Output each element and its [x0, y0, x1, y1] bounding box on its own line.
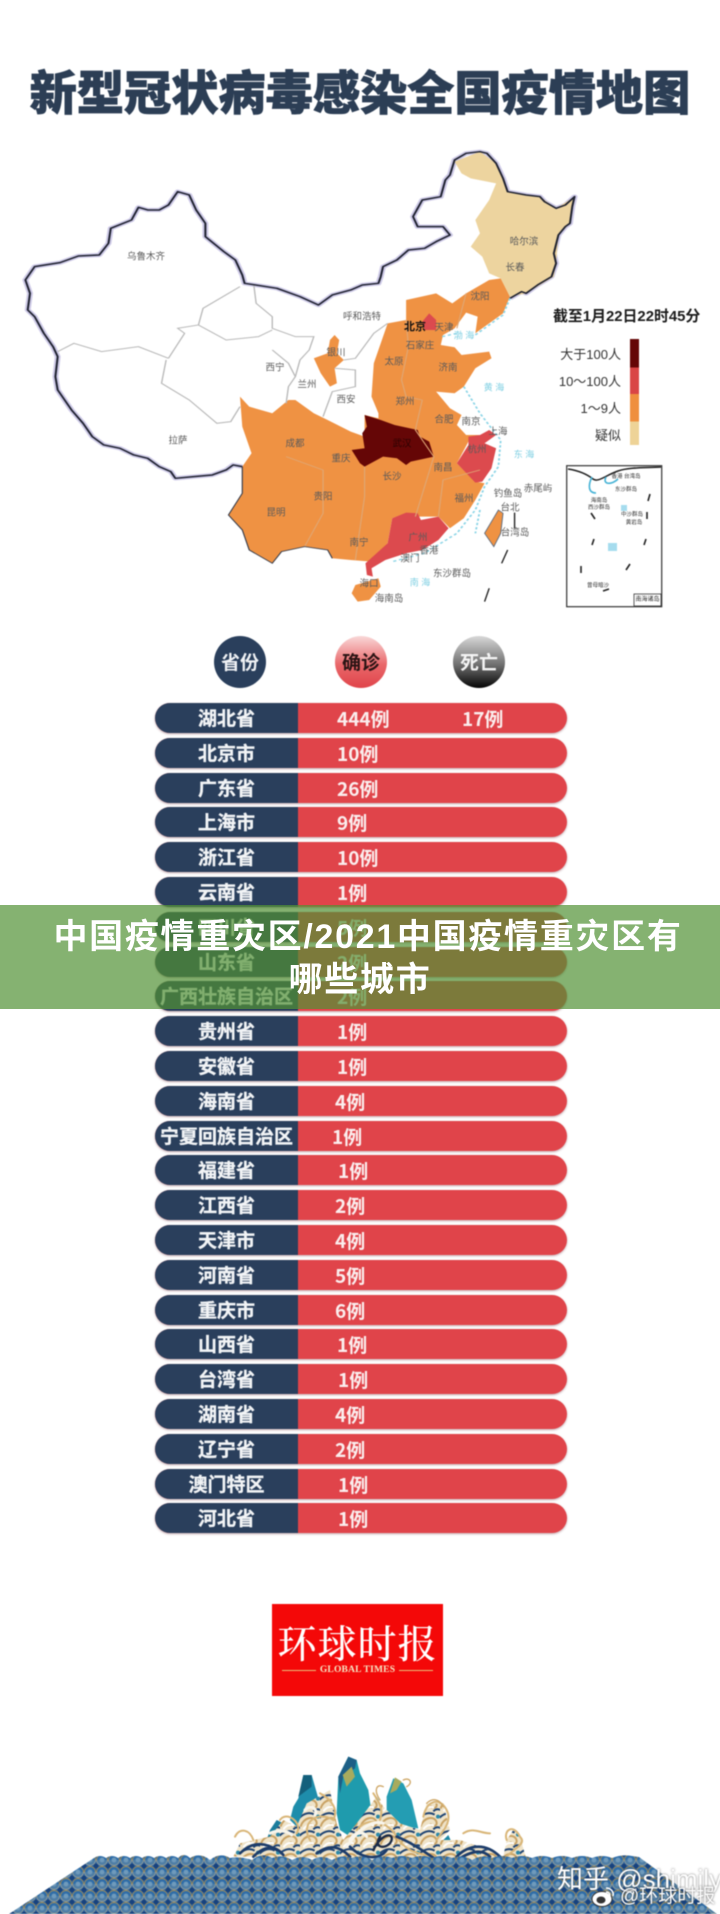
row: 湖北省: 444例	[337, 705, 390, 732]
waves	[233, 1779, 527, 1860]
row: 贵州省	[155, 1016, 567, 1046]
row: 海南省: 4例	[335, 1088, 365, 1115]
inset map: South China Sea: 海南岛	[591, 496, 608, 504]
red provinces	[366, 513, 449, 577]
row: 河南省: 5例	[335, 1262, 365, 1289]
row: 浙江省: 10例	[337, 844, 378, 871]
row: 福建省: 福建省	[198, 1156, 255, 1183]
row: 重庆市	[155, 1295, 567, 1325]
column header: confirmed	[335, 636, 387, 688]
city labels: 杭州	[467, 444, 487, 456]
city labels: 长春	[505, 262, 525, 274]
city labels: 钓鱼岛	[494, 488, 522, 500]
city labels: 长沙	[382, 471, 402, 483]
city labels: 南京	[461, 416, 481, 428]
city labels: 北京	[404, 319, 426, 333]
city labels: 广州	[408, 532, 428, 544]
row: 山东省: 山东省	[198, 948, 255, 975]
inset map: South China Sea	[565, 464, 664, 608]
data table	[154, 702, 568, 1536]
city labels: 哈尔滨	[510, 236, 539, 248]
row: 湖北省: 湖北省	[198, 704, 255, 731]
row: 广东省	[155, 773, 567, 803]
row: 云南省: 1例	[337, 879, 367, 906]
city labels: 郑州	[395, 396, 415, 408]
row: 四川省: 5例	[337, 914, 367, 941]
row: 湖北省: 17例	[462, 705, 503, 732]
row: 宁夏回族自治区: 宁夏回族自治区	[160, 1122, 293, 1149]
mountains	[267, 1757, 457, 1860]
row: 江西省: 2例	[335, 1192, 365, 1219]
watermark: weibo	[590, 1884, 716, 1908]
legend title: 截至1月22日22时45分	[553, 309, 700, 325]
Hubei dark region	[352, 415, 434, 467]
row: 澳门特区: 1例	[338, 1471, 368, 1498]
city labels: 重庆	[331, 453, 351, 465]
city labels: 合肥	[434, 414, 454, 426]
logo: Global Times	[272, 1604, 443, 1696]
city labels: 乌鲁木齐	[127, 251, 165, 263]
legend labels: 大于100人	[560, 347, 621, 362]
row: 安徽省: 安徽省	[198, 1052, 255, 1079]
inset map: South China Sea: 中沙群岛	[621, 510, 643, 518]
legend	[552, 308, 700, 446]
row: 辽宁省: 2例	[335, 1436, 365, 1463]
row: 辽宁省	[155, 1434, 567, 1464]
city labels: 银川	[326, 347, 346, 359]
overlay banner with headline: 中国疫情重灾区/2021中国疫情重灾区有	[53, 918, 683, 956]
row: 北京市: 10例	[337, 740, 378, 767]
row: 上海市	[155, 807, 567, 837]
city labels: 福州	[454, 493, 474, 505]
row: 福建省: 1例	[338, 1157, 368, 1184]
row: 江西省	[155, 1190, 567, 1220]
row: 湖南省: 湖南省	[198, 1400, 255, 1427]
national border and provinces	[25, 152, 575, 602]
row: 河北省: 河北省	[198, 1504, 255, 1531]
row: 天津市	[155, 1225, 567, 1255]
city labels: 澳门	[400, 553, 420, 565]
column header: province: 省份	[221, 648, 259, 675]
city labels: 成都	[285, 438, 305, 450]
inset map: South China Sea: 东沙群岛	[615, 485, 637, 493]
city labels: 台湾岛	[501, 527, 529, 539]
beige northeast provinces	[455, 152, 575, 297]
city labels: 东 海	[514, 448, 534, 459]
row: 河南省: 河南省	[198, 1261, 255, 1288]
city labels: 台北	[500, 502, 520, 514]
row: 海南省: 海南省	[198, 1087, 255, 1114]
row: 广东省: 广东省	[198, 774, 255, 801]
city labels: 太原	[384, 356, 404, 368]
legend colour bar	[630, 339, 639, 445]
city labels: 西安	[336, 394, 356, 406]
row: 广西壮族自治区: 2例	[337, 983, 367, 1010]
row: 山西省: 1例	[337, 1331, 367, 1358]
nine dash segments	[485, 513, 515, 602]
row: 天津市: 天津市	[198, 1226, 255, 1253]
row: 台湾省: 台湾省	[198, 1365, 255, 1392]
city labels: 赤尾屿	[524, 483, 552, 495]
row: 湖北省	[155, 703, 567, 733]
overlay banner with headline: 哪些城市	[289, 961, 431, 999]
watermark: weibo: @环球时报	[620, 1886, 715, 1907]
row: 四川省	[155, 912, 567, 942]
row: 北京市	[155, 738, 567, 768]
row: 广西壮族自治区: 广西壮族自治区	[160, 982, 293, 1009]
inset map: South China Sea: 黄岩岛	[626, 518, 643, 526]
watermark: zhihu: 知乎 @shimily	[557, 1864, 720, 1894]
city labels: 香港	[419, 545, 439, 557]
fish-scale sea mound	[9, 1855, 717, 1914]
legend labels: 10～100人	[559, 374, 621, 389]
logo calligraphy: 环球时报	[277, 1614, 438, 1670]
border line	[25, 152, 575, 478]
inset map: South China Sea: 香港 台湾岛	[611, 472, 641, 480]
row: 重庆市: 重庆市	[198, 1296, 255, 1323]
column header: deaths: 死亡	[460, 648, 498, 675]
wave mass	[233, 1790, 527, 1860]
row: 贵州省: 贵州省	[198, 1017, 255, 1044]
row: 浙江省	[155, 842, 567, 872]
city labels: 东沙群岛	[433, 568, 471, 580]
logo English name: GLOBAL TIMES	[320, 1665, 395, 1675]
column header: deaths	[453, 636, 505, 688]
row: 澳门特区	[155, 1469, 567, 1499]
row: 宁夏回族自治区	[155, 1121, 567, 1151]
column header: confirmed: 确诊	[342, 648, 380, 675]
row: 海南省	[155, 1086, 567, 1116]
row: 四川省: 四川省	[198, 913, 255, 940]
row: 辽宁省: 辽宁省	[198, 1435, 255, 1462]
legend labels: 疑似	[595, 428, 621, 443]
row: 湖南省	[155, 1399, 567, 1429]
city labels: 兰州	[297, 379, 317, 391]
city labels: 沈阳	[470, 291, 490, 303]
row: 台湾省	[155, 1364, 567, 1394]
city labels: 天津	[434, 323, 454, 334]
row: 山东省: 2例	[337, 949, 367, 976]
city labels: 西宁	[265, 362, 285, 374]
row: 北京市: 北京市	[198, 739, 255, 766]
row: 台湾省: 1例	[338, 1366, 368, 1393]
map of China	[22, 149, 578, 605]
row: 上海市: 9例	[337, 809, 367, 836]
orange provinces	[228, 278, 510, 563]
row: 江西省: 江西省	[198, 1191, 255, 1218]
row: 天津市: 4例	[335, 1227, 365, 1254]
overlay banner with headline	[0, 905, 720, 1009]
city labels: 海南岛	[375, 593, 403, 605]
city labels: 石家庄	[406, 340, 435, 352]
row: 广东省: 26例	[337, 775, 378, 802]
city labels: 南昌	[433, 462, 453, 474]
legend labels: 1～9人	[581, 401, 621, 416]
icon: weibo	[590, 1886, 615, 1908]
row: 云南省	[155, 877, 567, 907]
city labels	[127, 236, 552, 605]
column header: province	[214, 636, 266, 688]
city labels: 武汉	[392, 438, 412, 450]
row: 山西省: 山西省	[198, 1330, 255, 1357]
row: 河北省	[155, 1503, 567, 1533]
decorative mountains and waves	[8, 1756, 718, 1914]
row: 河南省	[155, 1260, 567, 1290]
row: 湖南省: 4例	[335, 1401, 365, 1428]
row: 重庆市: 6例	[335, 1297, 365, 1324]
row: 云南省: 云南省	[198, 878, 255, 905]
city labels: 上海	[488, 426, 508, 438]
row: 浙江省: 浙江省	[198, 843, 255, 870]
row: 广西壮族自治区	[155, 981, 567, 1011]
city labels: 呼和浩特	[343, 311, 381, 323]
row: 山西省	[155, 1329, 567, 1359]
city labels: 昆明	[266, 508, 286, 519]
city labels: 渤 海	[454, 329, 474, 340]
province lines	[58, 285, 388, 423]
coastline	[392, 298, 510, 562]
row: 澳门特区: 澳门特区	[188, 1470, 264, 1497]
city labels: 南 海	[410, 576, 430, 587]
city labels: 黄 海	[484, 381, 504, 392]
city labels: 海口	[359, 578, 379, 590]
row: 贵州省: 1例	[337, 1018, 367, 1045]
row: 河北省: 1例	[338, 1505, 368, 1532]
city labels: 拉萨	[168, 435, 188, 447]
row: 上海市: 上海市	[198, 808, 255, 835]
row: 山东省	[155, 947, 567, 977]
inset map: South China Sea: 南海诸岛	[635, 595, 660, 603]
city labels: 南宁	[349, 537, 369, 549]
city labels: 济南	[438, 362, 458, 374]
title: 新型冠状病毒感染全国疫情地图	[30, 55, 690, 124]
inset map: South China Sea: 西沙群岛	[588, 503, 610, 511]
row: 安徽省: 1例	[337, 1053, 367, 1080]
row: 宁夏回族自治区: 1例	[332, 1123, 362, 1150]
city labels: 贵阳	[313, 491, 333, 503]
row: 福建省	[155, 1155, 567, 1185]
row: 安徽省	[155, 1051, 567, 1081]
inset map: South China Sea: 曾母暗沙	[587, 581, 609, 589]
legend labels	[559, 347, 622, 443]
